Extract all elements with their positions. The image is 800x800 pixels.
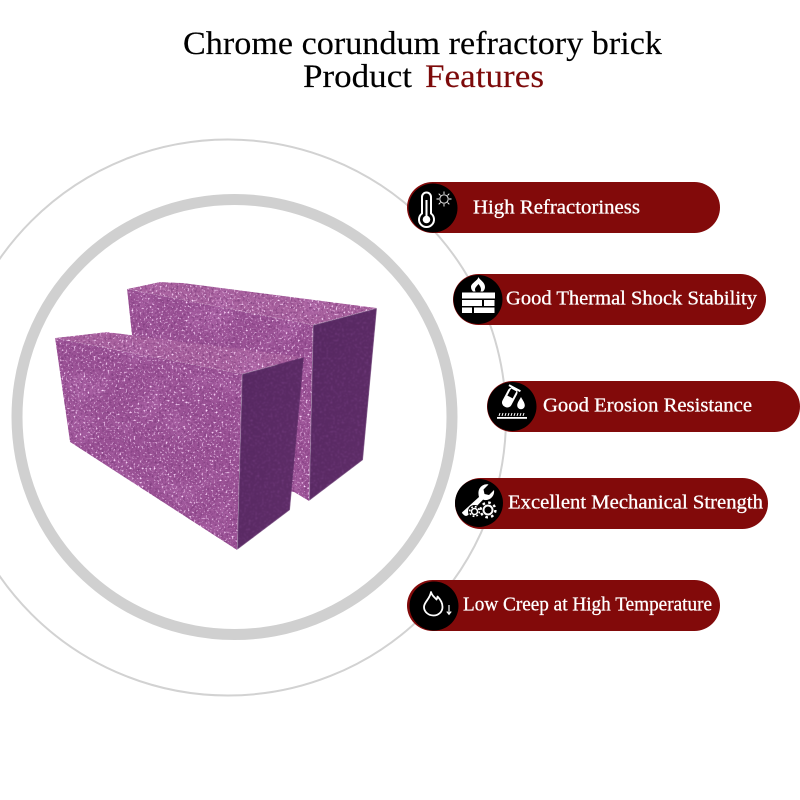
- front brick: [55, 332, 304, 550]
- outer thin ring: [0, 140, 506, 696]
- label: Good Erosion Resistance: [543, 394, 752, 416]
- label: Low Creep at High Temperature: [463, 594, 712, 616]
- icon: thermometer and sun: [408, 184, 458, 232]
- label: Excellent Mechanical Strength: [508, 492, 763, 514]
- feature pill: High Refractoriness: [407, 182, 720, 233]
- label: Good Thermal Shock Stability: [506, 288, 758, 310]
- label: High Refractoriness: [473, 196, 640, 218]
- back brick: [127, 282, 377, 501]
- feature pill: Excellent Mechanical Strength: [455, 478, 768, 529]
- icon: flame with down arrow: [410, 582, 458, 630]
- inner thick ring: [17, 200, 452, 634]
- icon: brick wall with flame: [454, 275, 502, 324]
- title: [183, 26, 663, 95]
- product photo: two purple bricks: [55, 282, 377, 550]
- feature pill: Low Creep at High Temperature: [407, 580, 720, 631]
- feature pill: Good Thermal Shock Stability: [453, 274, 766, 325]
- title: Product: [303, 59, 412, 95]
- feature pill: Good Erosion Resistance: [487, 381, 800, 432]
- title: Features: [425, 59, 544, 95]
- icon: wrench and gears: [455, 479, 503, 527]
- title: Chrome corundum refractory brick: [183, 26, 663, 62]
- icon: test tube dripping on surface: [488, 382, 536, 431]
